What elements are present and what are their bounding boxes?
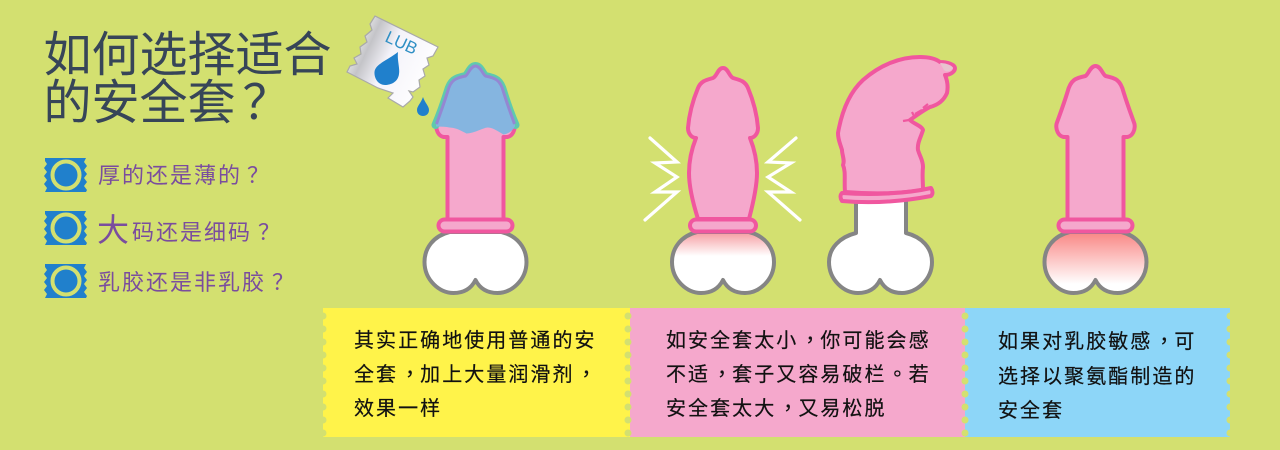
panel: yellow note: ， [405,358,427,380]
title: 的安全套？ [44,63,291,133]
icon: lubricant sachet: LUB [382,27,420,59]
panel: pink note: ， [717,358,739,380]
panel: blue note [965,308,1230,437]
panel: blue note: 如果对乳胶敏感 [998,331,1152,353]
panel: yellow note: 其实正确地使用普通的安 [354,329,597,352]
panel: pink note [628,308,965,437]
panel: yellow note: 全套 [354,364,398,386]
panel: yellow note: 加上大量润滑剂 [420,363,575,386]
panel: pink note: ， [805,324,827,346]
icon: large drop [374,52,399,85]
panel: pink note: 如安全套太小 [666,330,798,352]
figure: latex allergy [1044,66,1146,293]
panel: pink note: ， [783,392,805,414]
title [44,29,332,133]
question list [44,158,296,298]
icon: small falling drop [417,97,429,116]
panel: pink note: 你可能会感 [820,329,931,352]
panel: blue note: ， [1159,325,1181,347]
question: large or small size: 码还是细码 ？ [132,215,282,247]
icon: left tightness sparks [645,138,677,220]
panel: pink note: 不适 [666,364,710,386]
panel: blue note: 可 [1174,331,1196,353]
figure: condom too large [829,57,955,293]
question: large or small size: 大 [97,212,129,248]
question: thick or thin: 厚的还是薄的？ [98,158,271,190]
title: 如何选择适合 [44,29,332,82]
panel: yellow note [323,308,630,437]
panel: pink note: 。 [894,358,916,380]
panel: pink note: 又易松脱 [798,397,887,420]
lubricant coating [436,66,516,125]
panel: pink note: 套子又容易破栏 [732,363,887,386]
panel: yellow note: 效果一样 [354,397,442,420]
figure: condom too small [672,68,774,293]
question: latex or non-latex: 乳胶还是非乳胶 ？ [98,265,296,297]
panel: blue note: 选择以聚氨酯制造的 [998,365,1196,388]
panel: blue note: 安全套 [998,399,1064,422]
question: large or small size [44,211,282,248]
panel: pink note: 若 [909,363,931,386]
panel: pink note: 安全套太大 [666,398,776,420]
figure: lubricated condom [424,66,526,293]
icon: lubricant sachet [347,16,438,107]
icon: right tightness sparks [768,138,800,220]
panel: yellow note: ， [582,358,604,380]
